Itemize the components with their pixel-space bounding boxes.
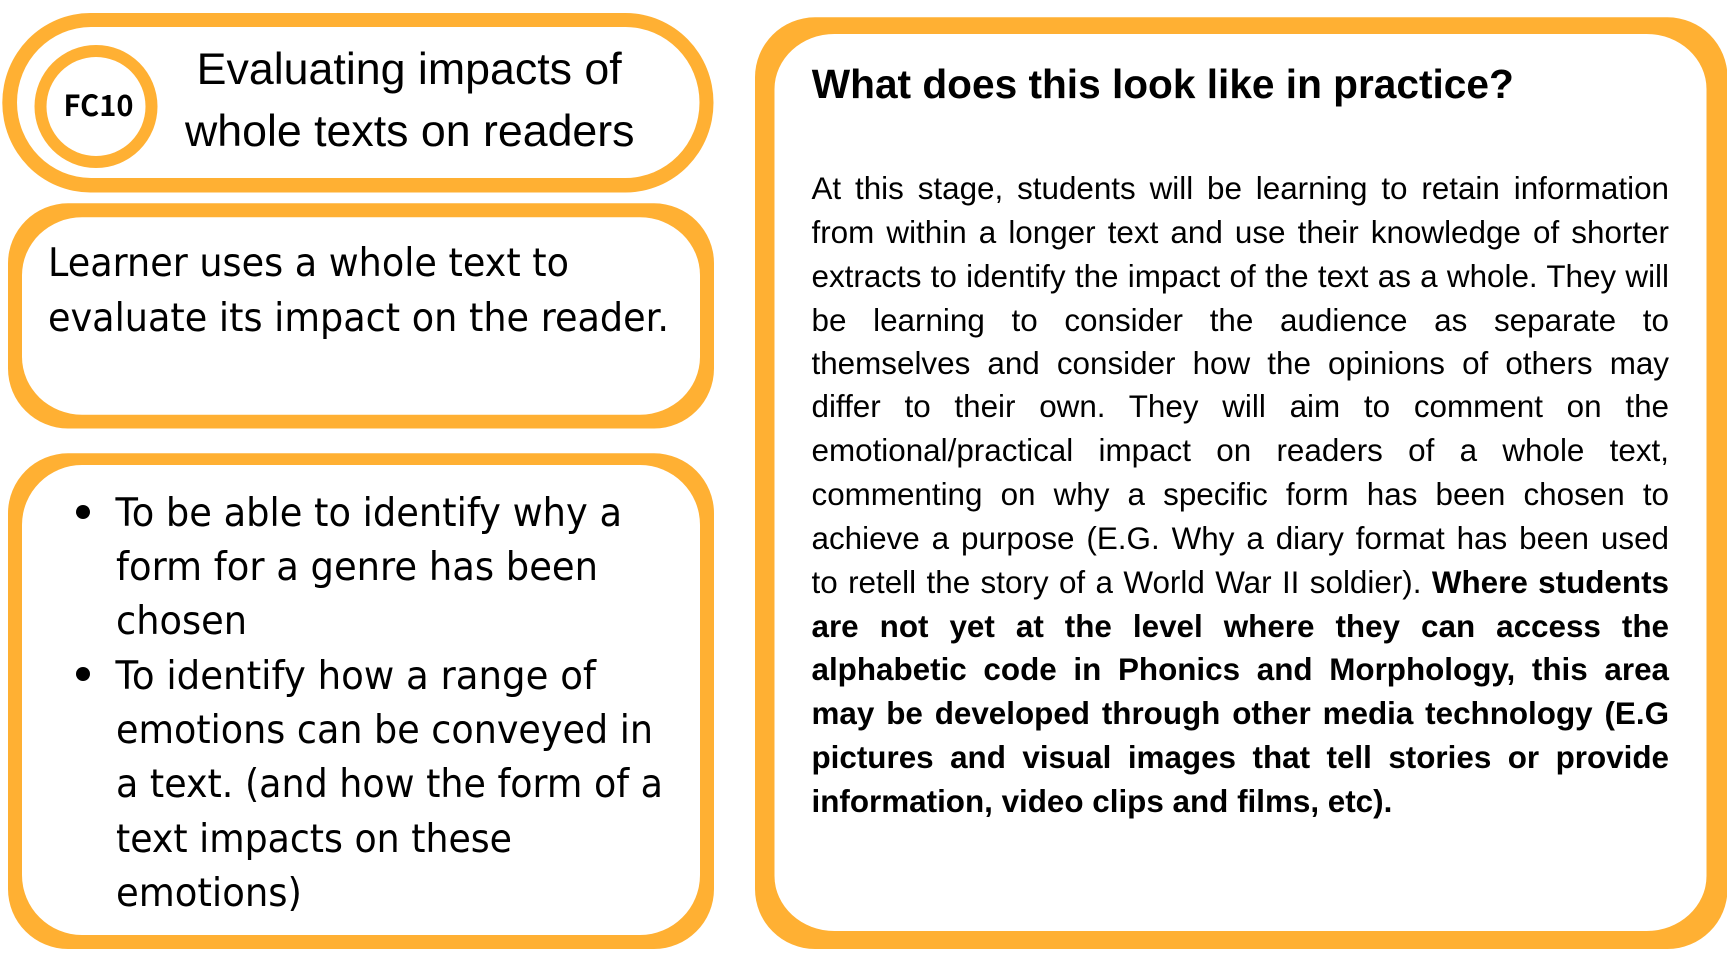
bullet item: form for a genre bbox=[76, 491, 622, 644]
practice body text: emotional/practical impact on readers of a whole text, bbox=[812, 433, 1669, 468]
bullet item: form for a genre: chosen bbox=[116, 599, 247, 644]
practice body text: information, video clips and films, etc). bbox=[812, 784, 1392, 819]
practice body text: achieve a purpose (E.G. Why a diary format has been used bbox=[812, 521, 1669, 556]
panel: title banner bbox=[2, 13, 714, 192]
practice body text: are not yet at the level where they can access the bbox=[812, 609, 1669, 644]
title heading bbox=[184, 45, 634, 156]
bullet item: range of emotions: emotions can be conveyed in bbox=[116, 708, 653, 753]
badge: FC10 bbox=[34, 45, 158, 168]
practice body text: may be developed through other media technology (E.G bbox=[812, 696, 1669, 731]
bullet item: range of emotions bbox=[76, 654, 663, 916]
practice body text: themselves and consider how the opinions of others may bbox=[812, 346, 1669, 381]
practice body text bbox=[812, 170, 1670, 819]
practice body text: pictures and visual images that tell stories or provide bbox=[812, 740, 1669, 775]
panel: learner statement bbox=[8, 203, 714, 428]
badge: FC10: FC10 bbox=[64, 83, 134, 125]
bullet item: range of emotions: To identify how a range of bbox=[115, 654, 597, 699]
title heading: whole texts on readers bbox=[184, 107, 634, 156]
panel: learning objectives bbox=[8, 453, 714, 949]
learner statement text: evaluate its impact on the reader. bbox=[48, 296, 669, 341]
practice body text: be learning to consider the audience as separate to bbox=[812, 303, 1669, 338]
learner statement text bbox=[48, 241, 669, 341]
panel: what does this look like in practice bbox=[755, 17, 1727, 949]
bullet item: range of emotions: a text. (and how the form of a bbox=[116, 762, 663, 807]
practice body text: At this stage, students will be learning to retain information bbox=[812, 170, 1669, 206]
practice heading: What does this look like in practice? bbox=[811, 61, 1513, 107]
practice body text: from within a longer text and use their knowledge of shorter bbox=[812, 215, 1669, 250]
bullet item: range of emotions: emotions) bbox=[116, 871, 302, 916]
practice body text: commenting on why a specific form has been chosen to bbox=[812, 477, 1669, 512]
bullet item: form for a genre: To be able to identify why a bbox=[115, 491, 622, 536]
practice body text: to retell the story of a World War II soldier). Where students bbox=[812, 565, 1669, 600]
practice body text: extracts to identify the impact of the text as a whole. They will bbox=[812, 259, 1669, 294]
title heading: Evaluating impacts of bbox=[197, 45, 622, 94]
bullet item: range of emotions: text impacts on these bbox=[116, 817, 512, 862]
learner statement text: Learner uses a whole text to bbox=[48, 241, 569, 286]
bullet item: form for a genre: form for a genre has been bbox=[116, 545, 598, 590]
practice body text: alphabetic code in Phonics and Morphology, this area bbox=[812, 652, 1669, 687]
practice body text: differ to their own. They will aim to comment on the bbox=[812, 389, 1669, 424]
